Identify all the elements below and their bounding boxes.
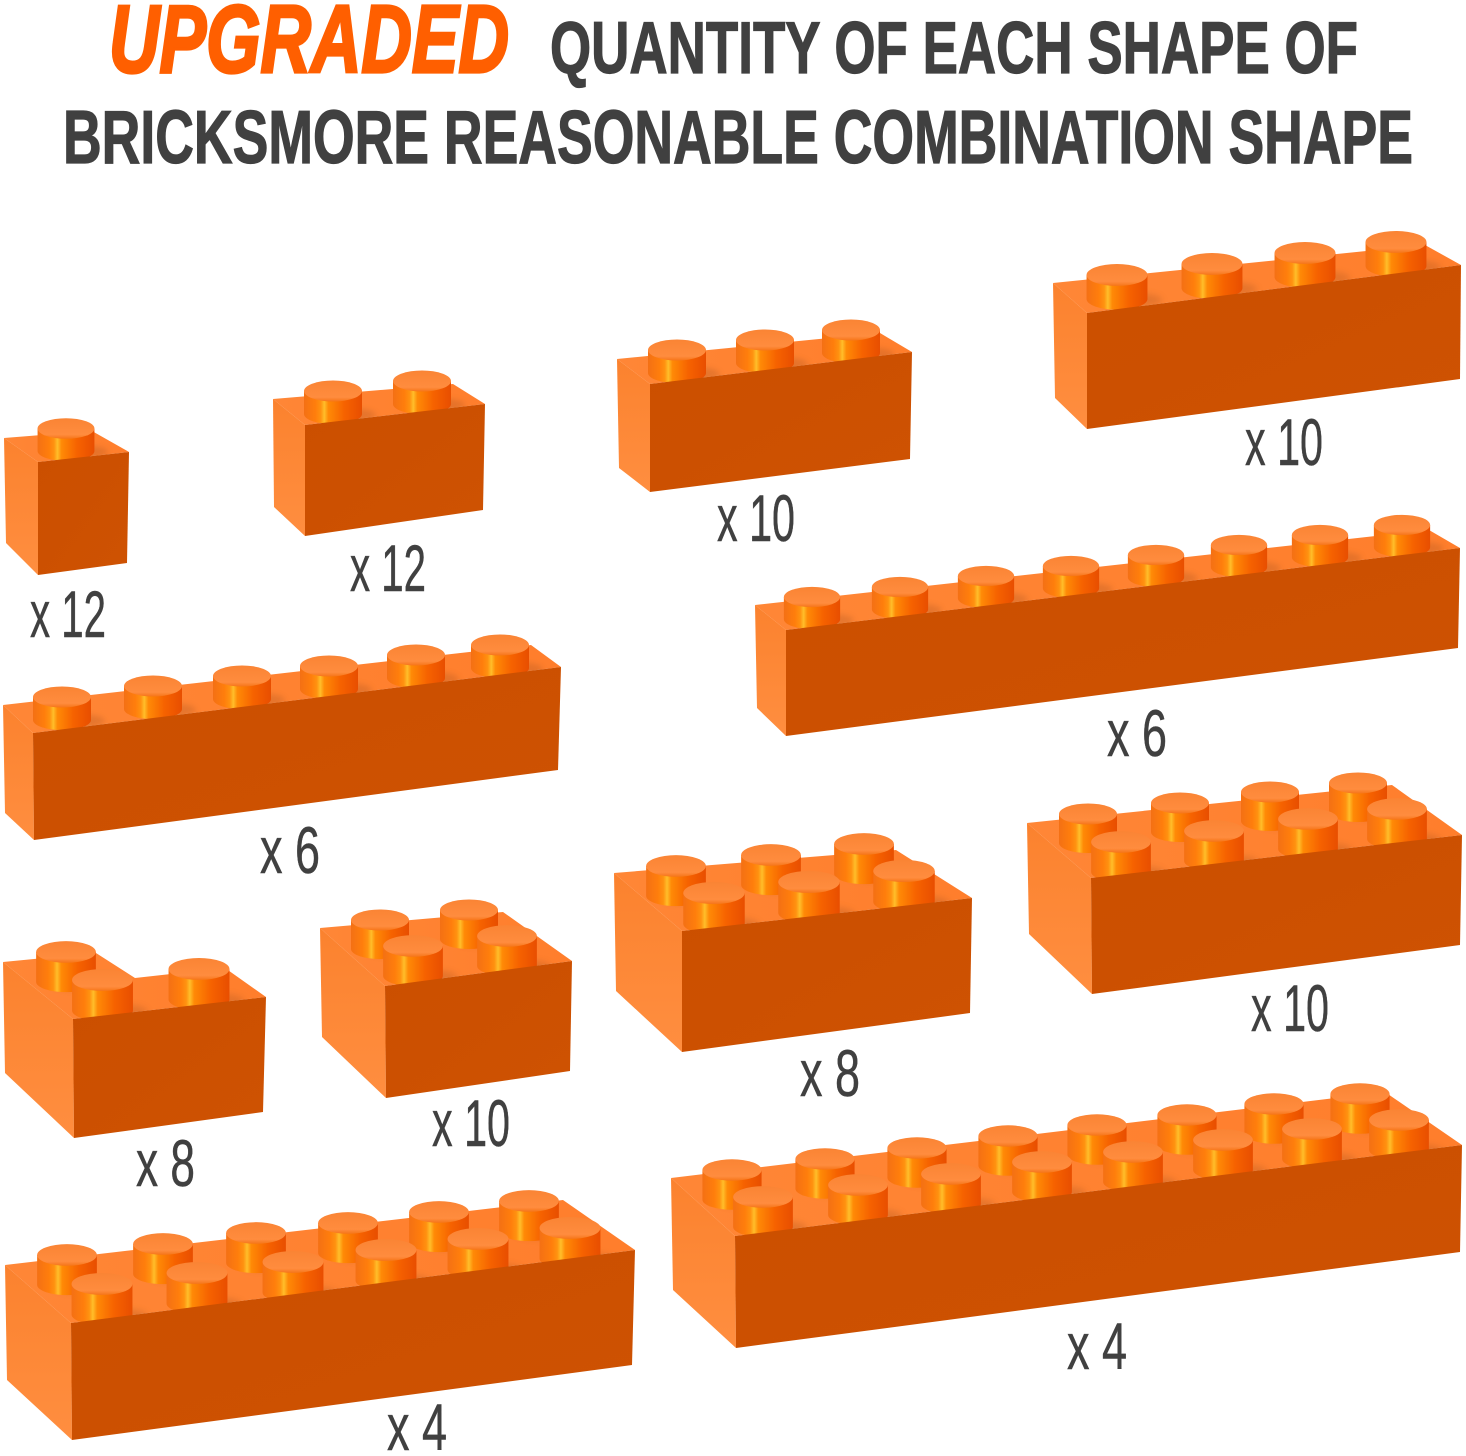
count label: x 6 — [1107, 696, 1167, 770]
item: 1x1 brick x12 — [4, 418, 129, 651]
count label: x 10 — [1251, 971, 1329, 1045]
item: 2x8 brick x4 — [671, 1083, 1462, 1383]
brick: 1x4 — [1053, 231, 1461, 429]
count label: x 10 — [1245, 405, 1323, 479]
item: 1x6 brick x6 — [3, 634, 561, 887]
item: 2x2 brick x10 — [320, 900, 572, 1160]
count label: x 8 — [800, 1036, 860, 1110]
item: 2x4 brick x10 — [1027, 772, 1462, 1045]
brick: 1x3 — [617, 320, 912, 492]
item: 2x3 brick x8 — [614, 833, 972, 1110]
count label: x 12 — [350, 531, 426, 605]
item: corner brick x8 — [3, 941, 266, 1200]
brick: 2x8 — [671, 1083, 1462, 1348]
brick: 1x2 — [273, 370, 485, 536]
brick: 2x2 — [320, 900, 572, 1098]
count label: x 8 — [136, 1126, 195, 1200]
count label: x 6 — [260, 813, 320, 887]
count label: x 12 — [30, 577, 106, 651]
count label: x 10 — [432, 1086, 510, 1160]
count label: x 10 — [717, 481, 795, 555]
item: 1x2 brick x12 — [273, 370, 485, 605]
brick: 3-stud corner — [3, 941, 266, 1138]
brick: 1x1 — [4, 418, 129, 575]
brick: 1x8 — [755, 515, 1460, 736]
brick: 2x4 — [1027, 772, 1462, 994]
brick: 2x6 — [5, 1190, 635, 1440]
count label: x 4 — [1067, 1309, 1127, 1383]
item: 1x8 brick x6 — [755, 515, 1460, 770]
brick: 2x3 — [614, 833, 972, 1052]
brick: 1x6 — [3, 634, 561, 840]
title — [63, 0, 1413, 179]
item: 1x4 brick x10 — [1053, 231, 1461, 479]
item: 1x3 brick x10 — [617, 320, 912, 555]
item: 2x6 brick x4 — [5, 1190, 635, 1456]
